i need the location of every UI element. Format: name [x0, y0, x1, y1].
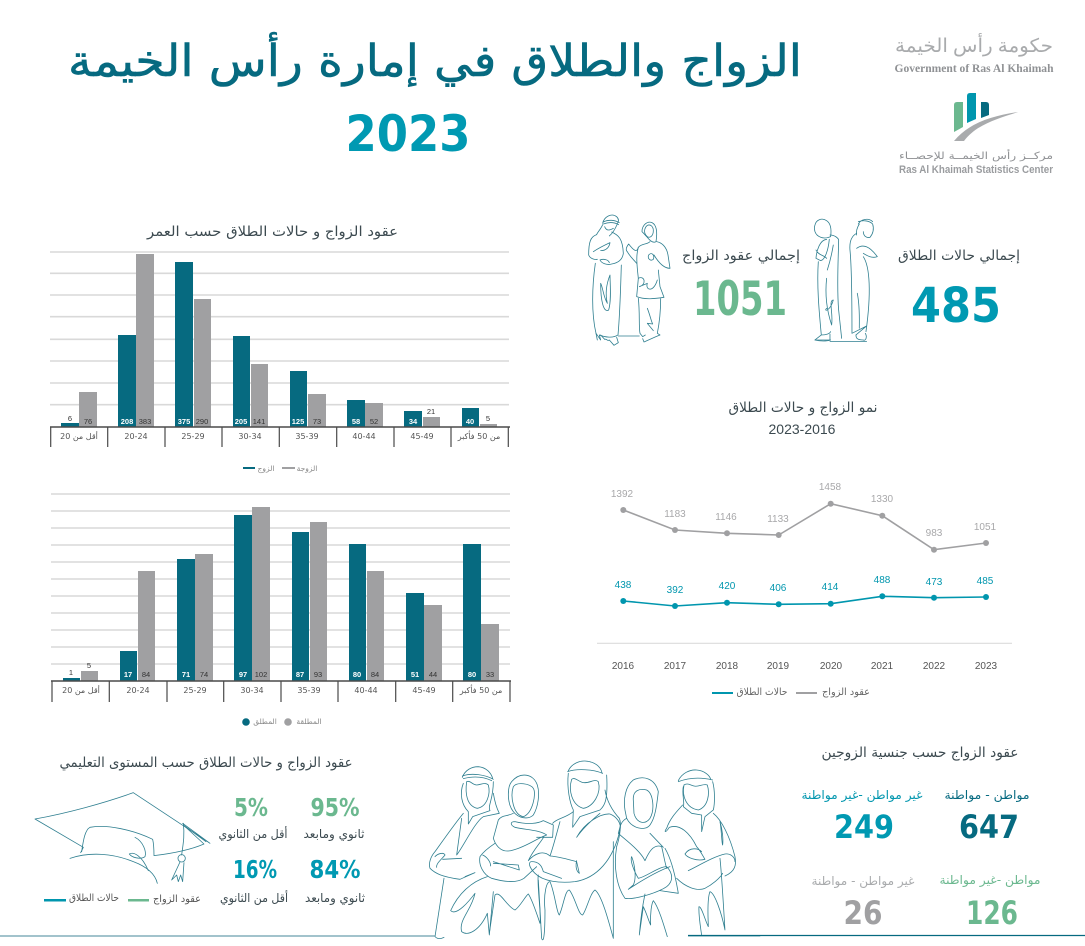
stat: citizen husband, non-citizen wife — [940, 873, 1040, 932]
value labels: 6 — [68, 414, 72, 423]
line: marriage contracts — [611, 482, 997, 553]
category labels: 45-49 — [412, 686, 436, 695]
stat: divorce, below secondary: أقل من الثانوي — [220, 890, 288, 906]
category labels: 45-49 — [410, 432, 434, 441]
legend: عقود الزواج — [153, 894, 201, 905]
panel: growth line chart: 2023-2016 — [769, 421, 836, 437]
category labels: 30-34 — [238, 432, 262, 441]
year axis labels: 2018 — [716, 661, 739, 672]
stat: divorce, below secondary — [220, 855, 288, 906]
legend: حالات الطلاق — [69, 893, 119, 904]
bars: divorced men — [63, 515, 481, 681]
legend — [243, 464, 317, 473]
stat: non-citizen husband, citizen wife: 26 — [844, 894, 882, 932]
stat: non-citizen husband, citizen wife — [812, 874, 914, 932]
heading: نمو الزواج و حالات الطلاق — [728, 400, 878, 416]
category labels — [60, 430, 500, 441]
line: divorce cases: 438 — [615, 580, 632, 591]
value labels: 80 — [353, 670, 361, 679]
value labels: 5 — [486, 414, 490, 423]
stat: citizen-citizen: 647 — [959, 808, 1019, 846]
value labels: 141 — [253, 417, 265, 426]
value labels: 44 — [429, 670, 437, 679]
value labels: 290 — [196, 417, 208, 426]
logo: Ras Al Khaimah Statistics Center: مركــز رأس الخيمــة للإحصــاء — [899, 149, 1053, 162]
icon: graduation cap — [35, 793, 210, 883]
title — [68, 32, 802, 163]
label: إجمالي حالات الطلاق — [898, 248, 1020, 264]
value labels — [69, 661, 494, 679]
legend — [44, 893, 201, 905]
line: divorce cases: 485 — [977, 576, 994, 587]
title: الزواج والطلاق في إمارة رأس الخيمة — [68, 32, 802, 87]
stat: marriage, secondary and above: ثانوي ومابعد — [304, 827, 364, 842]
category labels: 25-29 — [181, 432, 205, 441]
value labels: 84 — [142, 670, 150, 679]
value labels: 51 — [411, 670, 419, 679]
line: divorce cases: 392 — [667, 585, 684, 596]
category labels: 30-34 — [240, 686, 264, 695]
year axis labels: 2019 — [767, 661, 790, 672]
stat: citizen-citizen: مواطن - مواطنة — [944, 788, 1030, 803]
line: marriage contracts: 1146 — [715, 512, 737, 523]
value labels: 21 — [427, 407, 435, 416]
category labels: من 50 فأكبر — [457, 430, 500, 441]
stat: non-citizen husband, citizen wife: غير مواطن - مواطنة — [812, 874, 914, 889]
stat: divorce, secondary and above — [305, 855, 365, 906]
legend — [712, 687, 870, 698]
stat: non-citizen couple: غير مواطن -غير مواطنة — [802, 788, 922, 803]
panel: growth line chart — [597, 400, 1012, 698]
value labels: 125 — [292, 417, 304, 426]
value labels: 33 — [486, 670, 494, 679]
stat: marriage, below secondary: 5% — [234, 793, 268, 822]
value labels: 71 — [182, 670, 190, 679]
category labels — [62, 684, 502, 695]
category labels: 40-44 — [354, 686, 378, 695]
legend — [242, 717, 322, 726]
panel: age bar chart 1 — [50, 224, 510, 473]
heading: عقود الزواج حسب جنسية الزوجين — [822, 745, 1018, 761]
value labels: 74 — [200, 670, 208, 679]
stat: citizen husband, non-citizen wife: 126 — [966, 894, 1018, 932]
stat: divorce, secondary and above: ثانوي ومابعد — [305, 891, 365, 906]
category labels: من 50 فأكبر — [459, 684, 502, 695]
line: marriage contracts: 1458 — [819, 482, 842, 493]
category labels: أقل من 20 — [60, 431, 98, 441]
category labels: 20-24 — [124, 432, 148, 441]
line: divorce cases: 414 — [822, 582, 839, 593]
value labels: 84 — [371, 670, 379, 679]
value labels: 40 — [466, 417, 474, 426]
year axis labels: 2017 — [664, 661, 687, 672]
value labels: 383 — [139, 417, 151, 426]
value labels — [68, 407, 490, 426]
year axis labels — [612, 661, 998, 672]
line: marriage contracts: 1392 — [611, 489, 634, 500]
stat: marriage, below secondary: أقل من الثانوي — [218, 826, 288, 842]
category labels: 20-24 — [126, 686, 150, 695]
category labels: أقل من 20 — [62, 685, 100, 695]
legend: حالات الطلاق — [736, 687, 788, 698]
stat: marriage, below secondary — [218, 793, 288, 842]
value labels: 58 — [352, 417, 360, 426]
number: 485 — [911, 278, 1001, 334]
value labels: 93 — [314, 670, 322, 679]
year axis labels: 2021 — [871, 661, 894, 672]
legend: الزوج — [258, 464, 274, 473]
value labels: 375 — [178, 417, 190, 426]
value labels: 5 — [87, 661, 91, 670]
value labels: 73 — [313, 417, 321, 426]
icon: couple facing each other — [589, 215, 670, 345]
panel: marriages by spouse nationality — [802, 745, 1040, 932]
icon: couple back to back — [814, 219, 877, 342]
year axis labels: 2023 — [975, 661, 998, 672]
line: divorce cases: 420 — [719, 581, 736, 592]
line: marriage contracts: 1330 — [871, 494, 894, 505]
footer rule — [0, 934, 1085, 937]
value labels: 87 — [296, 670, 304, 679]
category labels: 25-29 — [183, 686, 207, 695]
line: marriage contracts: 1183 — [664, 509, 686, 520]
value labels: 102 — [255, 670, 267, 679]
stat: divorce, secondary and above: 84% — [310, 855, 360, 884]
number: 1051 — [693, 272, 787, 327]
category labels: 35-39 — [297, 686, 321, 695]
label: إجمالي عقود الزواج — [682, 248, 800, 264]
value labels: 1 — [69, 668, 73, 677]
value labels: 97 — [239, 670, 247, 679]
heading: marriage and divorce by age: عقود الزواج و حالات الطلاق حسب العمر — [146, 224, 398, 240]
line: divorce cases — [615, 575, 994, 609]
panel: age bar chart 2 — [51, 494, 511, 726]
value labels: 76 — [84, 417, 92, 426]
legend: المطلق — [253, 717, 277, 726]
line: marriage contracts: 1051 — [974, 522, 997, 533]
stat: citizen husband, non-citizen wife: مواطن -غير مواطنة — [940, 873, 1040, 888]
year axis labels: 2020 — [820, 661, 843, 672]
logo: Government of Ras Al Khaimah: Government of Ras Al Khaimah — [894, 63, 1054, 75]
value labels: 80 — [468, 670, 476, 679]
legend: الزوجة — [297, 464, 317, 473]
value labels: 17 — [124, 670, 132, 679]
logo: Ras Al Khaimah Statistics Center: Ras Al Khaimah Statistics Center — [899, 164, 1054, 176]
category labels: 40-44 — [352, 432, 376, 441]
line: marriage contracts: 983 — [926, 528, 943, 539]
line: divorce cases: 488 — [874, 575, 891, 586]
category labels: 35-39 — [295, 432, 319, 441]
stat: non-citizen couple: 249 — [834, 808, 894, 846]
bars: husband — [61, 262, 479, 427]
panel: education level — [35, 755, 365, 906]
logo: Government of Ras Al Khaimah: حكومة رأس الخيمة — [895, 33, 1053, 57]
stat: non-citizen couple — [802, 788, 922, 846]
heading: عقود الزواج و حالات الطلاق حسب المستوى التعليمي — [60, 755, 352, 771]
panel: total divorces — [898, 248, 1020, 334]
stat: divorce, below secondary: 16% — [233, 855, 277, 884]
line: divorce cases: 406 — [770, 583, 787, 594]
value labels: 52 — [370, 417, 378, 426]
bars: divorced women — [81, 507, 499, 681]
logo: Government of Ras Al Khaimah — [894, 33, 1054, 75]
value labels: 208 — [121, 417, 133, 426]
year axis labels: 2022 — [923, 661, 946, 672]
value labels: 205 — [235, 417, 247, 426]
legend: المطلقة — [296, 717, 322, 726]
stat: citizen-citizen — [944, 788, 1030, 846]
value labels: 34 — [409, 417, 418, 426]
bars: wife — [79, 254, 497, 427]
title: 2023 — [346, 105, 470, 163]
stat: marriage, secondary and above: 95% — [310, 793, 360, 822]
stat: marriage, secondary and above — [304, 793, 364, 842]
line: divorce cases: 473 — [926, 577, 943, 588]
year axis labels: 2016 — [612, 661, 635, 672]
panel: total marriages — [682, 248, 800, 327]
line: marriage contracts: 1133 — [767, 514, 789, 525]
legend: عقود الزواج — [822, 687, 870, 698]
logo: Ras Al Khaimah Statistics Center — [899, 93, 1054, 176]
icon: group of five people — [400, 761, 760, 940]
